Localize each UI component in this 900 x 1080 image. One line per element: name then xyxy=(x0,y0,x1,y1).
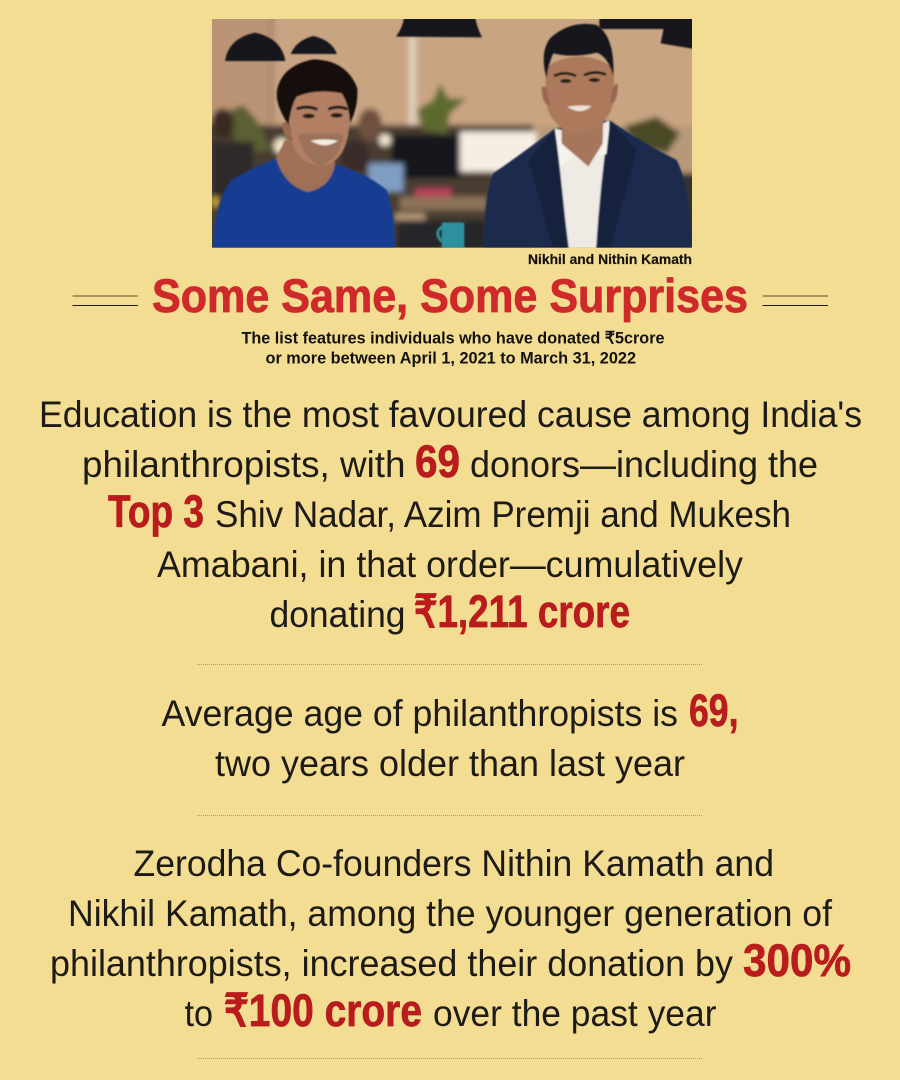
text block: Zerodha co-founders: Zerodha Co-founders Nithin Kamath and xyxy=(134,843,774,884)
text block: average age: two years older than last year xyxy=(215,743,685,784)
pendant lamps xyxy=(225,17,697,61)
text block: education xyxy=(39,394,862,637)
office background xyxy=(212,19,692,248)
text block: education: Top 3 xyxy=(108,486,204,537)
text block: Zerodha co-founders: philanthropists, increased their donation by xyxy=(50,943,733,984)
text block: education: Education is the most favoured cause among India's xyxy=(39,394,862,435)
text block: education: philanthropists, with xyxy=(82,444,406,485)
subtitle xyxy=(242,328,664,368)
text block: Zerodha co-founders xyxy=(50,843,851,1036)
text block: Zerodha co-founders: ₹100 crore xyxy=(224,985,422,1036)
photo caption: Nikhil and Nithin Kamath xyxy=(528,251,692,267)
photo: Nikhil and Nithin Kamath xyxy=(212,19,692,248)
text block: education: donating xyxy=(270,594,406,635)
person right: Nithin xyxy=(483,24,692,250)
subtitle: or more between April 1, 2021 to March 31, 2022 xyxy=(266,348,636,368)
text block: education: ₹1,211 crore xyxy=(414,586,630,637)
text block: average age xyxy=(162,685,738,784)
coffee mug xyxy=(438,222,464,249)
text block: Zerodha co-founders: to xyxy=(184,993,213,1034)
text block: average age: 69, xyxy=(689,685,738,736)
text block: Zerodha co-founders: Nikhil Kamath, among the younger generation of xyxy=(68,893,833,934)
subtitle: The list features individuals who have donated ₹5crore xyxy=(242,328,664,348)
text block: education: Shiv Nadar, Azim Premji and Mukesh xyxy=(215,494,791,535)
text block: education: Amabani, in that order—cumulatively xyxy=(157,544,743,585)
text block: education: 69 xyxy=(415,436,460,487)
person left: Nikhil xyxy=(213,59,395,250)
text block: education: donors—including the xyxy=(470,444,818,485)
text block: Zerodha co-founders: over the past year xyxy=(433,993,716,1034)
text block: Zerodha co-founders: 300% xyxy=(743,935,851,986)
text block: average age: Average age of philanthropists is xyxy=(162,693,678,734)
title with side rules: Some Same, Some Surprises xyxy=(152,269,748,322)
